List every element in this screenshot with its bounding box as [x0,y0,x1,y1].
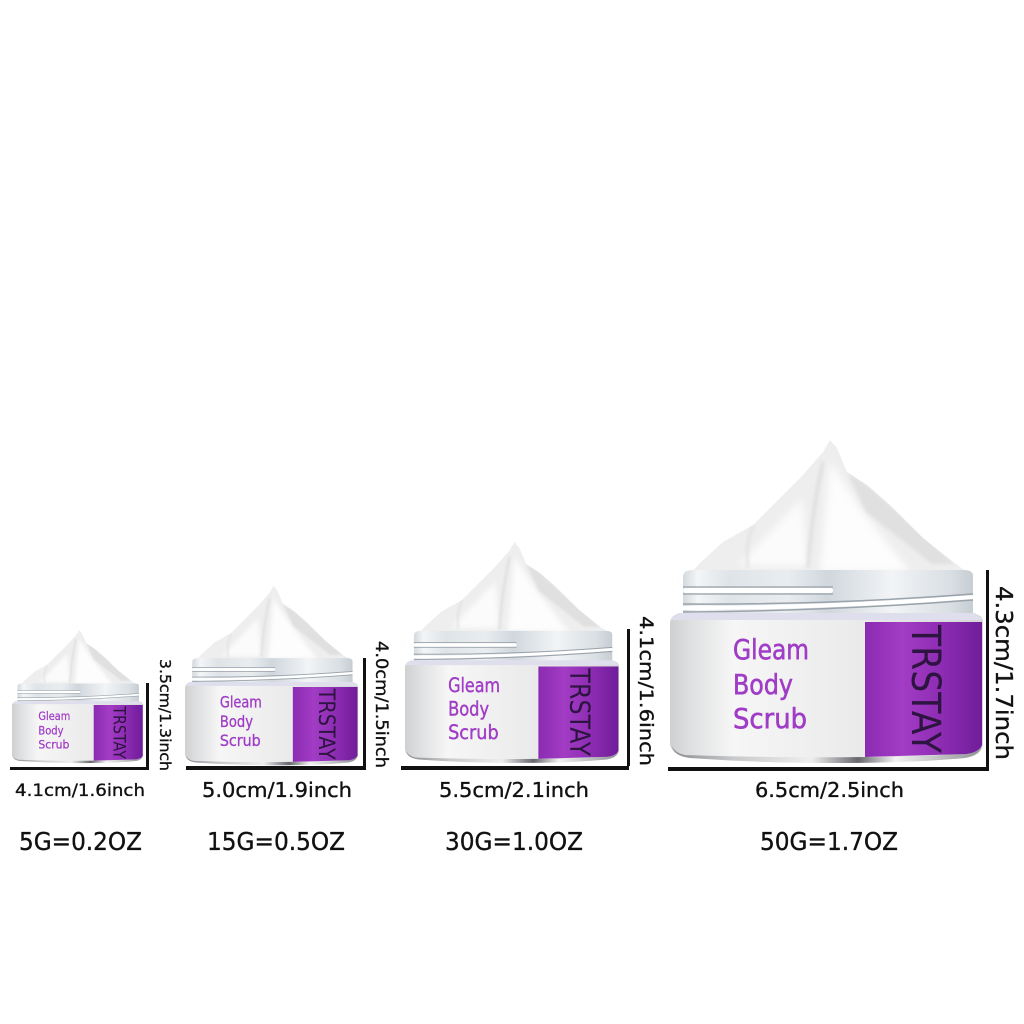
product name [733,633,809,735]
jar: 5G [12,630,143,763]
height label: 5G: 3.5cm/1.3inch [156,659,174,771]
cream [422,542,606,631]
product name: Body [448,698,489,721]
height label: 50G: 4.3cm/1.7inch [990,586,1016,760]
lid [192,658,353,683]
brand: TRSTAY [313,688,339,760]
width line: 50G [668,767,989,771]
purple label [94,705,143,761]
jar: 30G [405,542,619,763]
width label: 5G: 4.1cm/1.6inch [15,781,145,801]
jar: 50G [670,440,983,763]
brand: TRSTAY [109,705,129,760]
weight label: 30G: 30G=1.0OZ [445,827,583,856]
cream [694,440,964,570]
width label: 50G: 6.5cm/2.5inch [755,778,904,802]
jar body [405,660,619,763]
purple label [538,666,618,759]
weight label: 5G: 5G=0.2OZ [19,827,142,856]
jar body [670,613,983,763]
product name: Scrub [448,721,499,744]
purple label [293,687,358,762]
product name: Gleam [733,633,809,666]
width line: 5G [10,767,149,770]
jar: 15G [185,586,358,765]
product name: Gleam [220,694,262,712]
lid [17,684,139,702]
product name [38,709,70,752]
width label: 30G: 5.5cm/2.1inch [439,778,589,802]
jar body [12,701,143,763]
height line: 50G [986,570,989,767]
brand: TRSTAY [902,624,948,753]
height label: 15G: 4.0cm/1.5inch [371,641,391,768]
height line: 30G [627,629,630,766]
product name [220,694,262,750]
jar body [185,682,358,765]
product name: Gleam [448,674,500,697]
lid [683,570,973,615]
product name: Body [220,713,253,731]
width label: 15G: 5.0cm/1.9inch [202,778,352,802]
weight label: 50G: 50G=1.7OZ [760,827,898,856]
product name: Scrub [220,732,261,750]
purple label [865,622,982,757]
brand: TRSTAY [564,668,595,756]
height line: 5G [146,683,149,767]
product name: Body [733,668,793,701]
width line: 30G [401,766,629,770]
product name: Scrub [38,738,69,752]
product name: Scrub [733,702,807,735]
product name: Body [38,724,64,738]
cream [22,630,135,684]
product name [448,674,500,744]
weight label: 15G: 15G=0.5OZ [207,827,345,856]
product name: Gleam [38,709,70,723]
height line: 15G [363,658,366,766]
cream [198,586,347,658]
lid [414,631,612,662]
width line: 15G [186,766,366,770]
height label: 30G: 4.1cm/1.6inch [635,616,657,766]
